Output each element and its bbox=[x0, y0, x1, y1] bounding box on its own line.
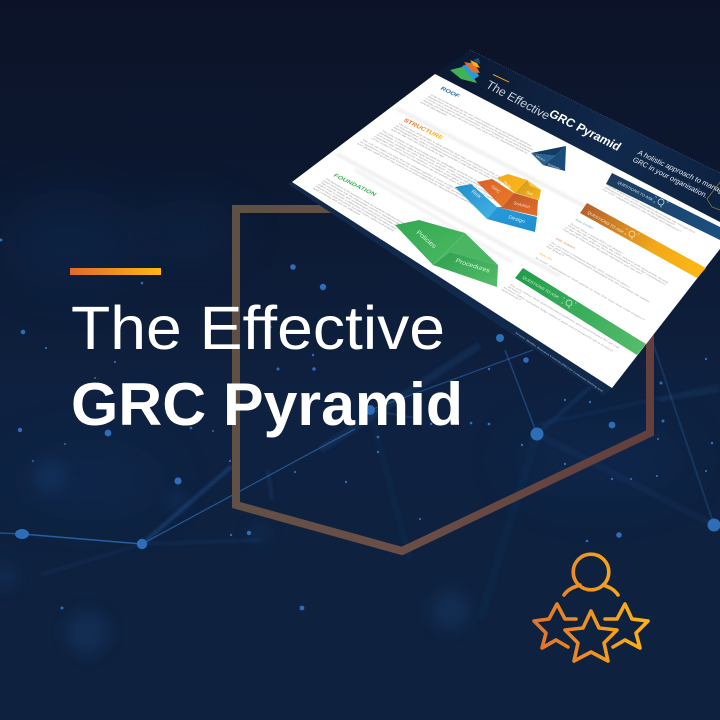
structure questions: for them? bbox=[545, 245, 566, 258]
roof heading: ROOF bbox=[439, 86, 461, 99]
layer: yellow: Rule bbox=[502, 180, 513, 190]
icon: lightbulb bbox=[562, 296, 576, 308]
foundation pyramid: Policies bbox=[415, 229, 438, 251]
layer: yellow: Set bbox=[526, 190, 535, 197]
icon: shoulders bbox=[564, 585, 618, 595]
icon: left star bbox=[534, 604, 576, 648]
questions band: foundation: QUESTIONS TO ASK bbox=[521, 275, 560, 299]
layer: yellow bbox=[497, 174, 541, 200]
questions band: foundation bbox=[515, 268, 646, 355]
foundation heading: FOUNDATION bbox=[332, 173, 378, 198]
title: GRC Pyramid bbox=[71, 371, 463, 438]
header title: The Effective bbox=[483, 78, 553, 122]
section dividers bbox=[337, 108, 596, 276]
structure text bbox=[356, 118, 521, 213]
layer: orange bbox=[477, 179, 538, 216]
foundation pyramid bbox=[395, 220, 498, 287]
layer: blue bbox=[455, 184, 537, 232]
foundation text: which document how the organisation intends to manage its risks bbox=[322, 179, 403, 227]
structure text: Well designed rules reduce complexity and provide a solid basis for the GRC solution bbox=[392, 126, 502, 185]
structure text: workflows. It should offer a single source of truth, make monitoring possible and give users bbox=[378, 131, 506, 200]
sheet page bbox=[292, 74, 720, 388]
roof text: and its risk appetite. bbox=[419, 101, 449, 117]
header accent dash bbox=[493, 74, 509, 82]
structure questions: to the right data and are the rules embedded across the organisation? bbox=[564, 226, 668, 286]
layer: orange: Solution bbox=[513, 201, 532, 209]
structure questions: Does the rule design enable the GRC solution with appropriate access bbox=[567, 224, 670, 284]
layer: orange: GRC bbox=[490, 184, 502, 195]
header mini hexagon bbox=[707, 182, 720, 210]
icon: person with three stars bbox=[534, 554, 648, 661]
structure text: of the control environment so management can act quickly when things go wrong. bbox=[371, 137, 480, 196]
foundation pyramid: Procedures bbox=[454, 258, 492, 275]
structure questions: Do you have a business friendly GRC solution in place? bbox=[550, 241, 632, 289]
structure heading: STRUCTURE bbox=[402, 118, 445, 141]
structure text: The GRC solution is the technology used for embedding controls into everyday processes and bbox=[380, 129, 508, 198]
foundation text: The foundation of the pyramid is made up of policies and procedures bbox=[324, 177, 406, 225]
hexagon outline bbox=[236, 209, 650, 551]
questions band: structure: QUESTIONS TO ASK bbox=[586, 210, 625, 234]
structure text: and auditors visibility on risks, issues and actions. An effective solution is configurable and bbox=[376, 133, 503, 201]
structure questions: How well do rules change alongside regulations and new risk? bbox=[562, 228, 643, 275]
icon: right star bbox=[605, 604, 648, 648]
structure text: as regulations change and should be reviewed regularly. A clear rule set avoids false alerts bbox=[359, 140, 482, 206]
structure pyramid bbox=[455, 174, 541, 232]
structure questions: Do you have a robust RDO rule design? bbox=[569, 222, 625, 255]
accent bar bbox=[70, 268, 161, 275]
sheet footer band bbox=[288, 182, 612, 396]
foundation questions: areas? bbox=[507, 285, 522, 295]
footer source note: Source: Moeller, Business Controls (IRC) for Corporate Risking and bbox=[515, 331, 604, 393]
icon: lightbulb bbox=[624, 226, 640, 240]
roof text: At the top of the pyramid sits the roof, which consists of values and leadership behaviour bbox=[429, 93, 533, 147]
small navy pyramid: roof: Strategy bbox=[546, 163, 561, 170]
foundation questions: resource? bbox=[500, 288, 523, 302]
structure text: and allows staff to trust the outcome of automated checks throughout the organisation. bbox=[356, 142, 479, 208]
structure text: The rule set holds the logic that the solution applies. It must remain accurate and current bbox=[361, 138, 484, 204]
small navy pyramid: roof bbox=[531, 146, 566, 171]
foundation questions bbox=[500, 282, 622, 355]
document sheet bbox=[288, 50, 720, 396]
structure text: integrates with other business systems. It enables automation and supports good reporting bbox=[373, 135, 501, 203]
questions band: roof: QUESTIONS TO ASK bbox=[616, 180, 654, 202]
foundation questions: Is your GRC solution fully utilised and used properly as a trusted bbox=[503, 286, 615, 352]
questions band: structure bbox=[580, 203, 706, 278]
roof text: Strategy and objectives give direction and make clear what the organisation stands for bbox=[422, 99, 529, 155]
icon: head bbox=[573, 554, 609, 590]
layer: blue: Design bbox=[507, 215, 526, 225]
mini pyramid logo bbox=[450, 58, 480, 83]
roof questions: effectiveness and governance at the highest level? bbox=[604, 186, 677, 226]
foundation text: Without these clear documents the other layers cannot work properly bbox=[314, 185, 396, 232]
structure questions: Rule Set bbox=[538, 252, 553, 261]
icon: center star bbox=[565, 611, 617, 661]
roof questions: Are GRC initiatives aligned with strategy and objectives? bbox=[601, 188, 683, 233]
structure questions: Rule Design bbox=[574, 218, 595, 230]
structure text: and for the rule set that is built on top. bbox=[390, 128, 446, 158]
structure questions: Is your organisation still using or lost the thin-line rule matrix? bbox=[534, 256, 646, 321]
foundation text: and controls will not be effective. bbox=[312, 187, 363, 217]
roof text: Management sets the tone for the entire organisation and its approach to risk management bbox=[427, 95, 534, 151]
layer: blue: Risk bbox=[470, 189, 482, 200]
small navy pyramid: roof: Values bbox=[534, 154, 546, 162]
foundation questions: Do you have well documented policies and procedures for all risk bbox=[509, 283, 622, 350]
background network bbox=[0, 190, 720, 655]
roof text: A strong culture supports effective governance, risk and compliance across each business bbox=[424, 97, 532, 153]
sheet header band bbox=[435, 50, 720, 226]
structure questions: GRC Solution bbox=[554, 237, 577, 250]
structure text: The first layer, Rule Design, is about defining clear rules and making them easy to adopt bbox=[397, 122, 507, 181]
title: The Effective bbox=[71, 294, 445, 362]
structure questions: Are your compliance processes automated and can it produce risk reports bbox=[548, 243, 651, 303]
title bbox=[71, 294, 463, 438]
questions band: roof bbox=[606, 173, 720, 240]
header title bold: GRC Pyramid bbox=[546, 107, 624, 153]
roof questions: Do the board and senior executives demonstrate risk management bbox=[606, 184, 696, 234]
icon: lightbulb bbox=[654, 194, 668, 208]
structure text: so that employees know which procedures to follow and how risks are to be controlled bbox=[395, 124, 505, 183]
foundation text: staff in order to provide a stable base for everything else above them bbox=[317, 183, 398, 230]
foundation text: They must be simple, well communicated and easily accessible to all bbox=[319, 181, 401, 228]
structure questions bbox=[534, 218, 673, 321]
